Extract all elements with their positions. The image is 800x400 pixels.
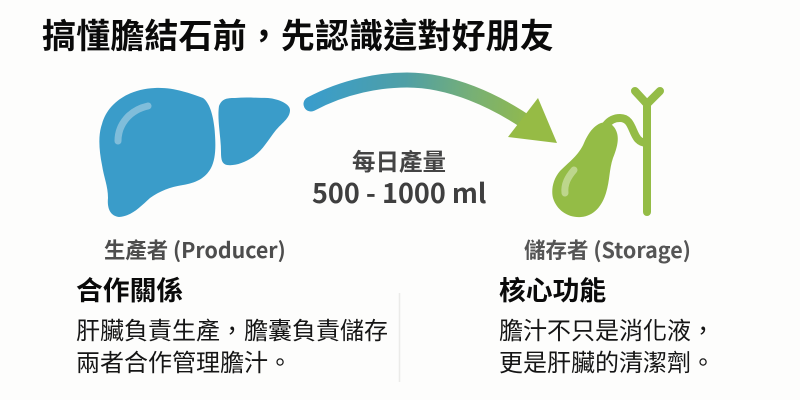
liver left lobe [218,98,290,165]
partnership text [76,311,388,378]
daily output label: 每日產量 [352,143,446,177]
divider [398,293,400,382]
liver right lobe [99,88,215,217]
arrow head [508,98,557,143]
core function text: 膽汁不只是消化液， [499,311,715,346]
bile duct [606,91,660,212]
core function text [499,311,715,378]
icon: gallbladder [552,91,660,217]
liver highlight [118,106,148,141]
icon: liver [99,88,290,217]
gallbladder highlight [565,170,574,193]
partnership heading: 合作關係 [76,269,183,308]
daily output value: 500 - 1000 ml [312,172,486,211]
core function text: 更是肝臟的清潔劑。 [499,343,715,378]
core function heading: 核心功能 [499,269,606,308]
title: 搞懂膽結石前，先認識這對好朋友 [42,9,554,58]
gallbladder body [552,122,618,217]
arrow shaft [311,80,532,126]
arrow [311,80,557,143]
panel: core function [499,269,715,378]
producer label: 生產者 (Producer) [104,234,286,265]
partnership text: 兩者合作管理膽汁。 [76,343,292,378]
storage label: 儲存者 (Storage) [524,234,691,265]
panel: partnership [76,269,388,378]
partnership text: 肝臟負責生產，膽囊負責儲存 [76,311,388,346]
